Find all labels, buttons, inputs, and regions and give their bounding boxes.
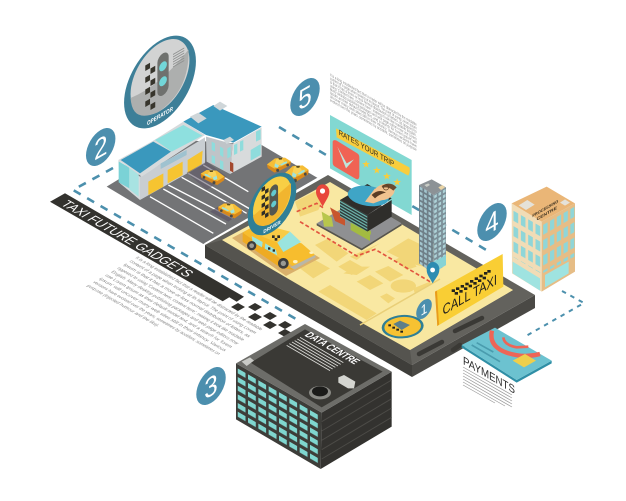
tablet top face — [205, 175, 535, 365]
shopping bags — [322, 207, 345, 227]
side windows — [252, 236, 277, 255]
front bumper — [290, 255, 316, 269]
panel: rate your trip billboard — [330, 115, 412, 215]
badge: driver traffic light — [248, 162, 296, 246]
panel: call taxi front area — [381, 254, 552, 383]
tablet body — [205, 175, 535, 377]
text block: trip rating copy: content of a page when looking at its layout. The point of using Lorem Ipsum — [330, 76, 417, 131]
taxi body top — [243, 223, 315, 267]
parking lot — [107, 140, 318, 244]
map screen — [222, 182, 513, 350]
data centre copy — [287, 337, 343, 371]
roof corner vent — [242, 357, 254, 366]
checker column — [145, 60, 155, 113]
map divider — [360, 279, 440, 325]
billboard board — [330, 115, 412, 215]
text block: payments copy — [463, 367, 512, 407]
number badge 3 — [196, 360, 226, 412]
text block: intro copy: ipsum' will uncover many web sites still in their infancy. Various — [97, 277, 228, 353]
roof exhaust hole — [312, 386, 328, 396]
call taxi label: CALL TAXI — [443, 272, 497, 319]
banner shape — [50, 193, 244, 302]
tan car pad — [232, 222, 320, 276]
panel: processing centre building — [512, 187, 575, 292]
traffic light — [269, 182, 278, 218]
parked taxi 1 body — [201, 170, 225, 185]
checker marks — [268, 235, 280, 252]
bushes — [351, 222, 371, 241]
panel: city block on the map — [317, 181, 402, 250]
window grids — [513, 208, 541, 273]
text block: intro copy: English. Many desktop publishing packages and web page editors now — [109, 270, 240, 346]
low depot building — [118, 122, 205, 200]
taxi body side — [243, 233, 294, 270]
dashed connector: badge 5 to building 4 — [279, 127, 488, 251]
pin: blue location marker — [427, 262, 439, 283]
number badge 2: 2 — [94, 128, 107, 167]
sign shade — [435, 291, 439, 326]
number badge 3: 3 — [204, 367, 218, 406]
card chip — [513, 354, 536, 367]
number badge 2 — [86, 122, 115, 172]
wheels — [247, 241, 256, 250]
rating stars: ★ — [382, 171, 391, 182]
parked taxi 2 body — [218, 203, 242, 218]
driver label: DRIVER — [263, 219, 281, 236]
map front band — [362, 280, 513, 350]
operator label: OPERATOR — [147, 106, 174, 128]
red check icon — [333, 140, 359, 179]
pin: red marker centre — [320, 188, 325, 194]
text block: intro copy: content of a page when looking at its layout. The point of using Lorem — [127, 259, 258, 335]
yellow title strip — [336, 128, 410, 176]
roof exhaust — [309, 386, 331, 399]
text block: intro copy: versions have evolved over the years, sometimes by accident, sometimes on — [91, 280, 222, 356]
text block: trip rating copy: is that it has a more-or-less normal distribution of letters, as opposed to — [330, 79, 417, 134]
text block: intro copy: use Lorem Ipsum as their default model text, and a search for 'lorem — [103, 273, 234, 349]
right wall stripes — [322, 380, 392, 459]
parking stripes — [150, 165, 252, 233]
headlights — [293, 260, 298, 263]
text block: trip rating copy: Many desktop publishing packages and web page editors now use Lorem — [330, 86, 417, 142]
big yellow taxi — [243, 223, 316, 270]
processing centre label second line: CENTRE — [537, 205, 557, 222]
parked taxi 2 shadow — [210, 202, 243, 222]
right wall — [321, 372, 392, 469]
windows — [238, 368, 319, 465]
pin: blue marker centre — [430, 268, 435, 272]
text block: intro copy — [85, 256, 264, 360]
panel: operator depot and parking lot — [107, 102, 320, 244]
traffic light — [157, 50, 169, 98]
rates your trip label: RATES YOUR TRIP — [339, 128, 394, 169]
parked taxi 1 shadow — [187, 162, 227, 190]
taxi logo — [381, 314, 424, 340]
payments label: PAYMENTS — [463, 355, 515, 397]
city plate edge — [317, 223, 402, 250]
dashed connector: badge 2 to data centre — [73, 168, 296, 319]
rating stars: ★ — [372, 165, 381, 176]
cabin roof — [253, 225, 290, 243]
dashed connector: processing centre to payments — [526, 291, 584, 336]
text block: trip rating copy: evolved over the years, sometimes by accident, sometimes on purpose — [330, 97, 417, 152]
rating stars — [362, 159, 402, 188]
checker column — [262, 184, 269, 220]
title text: TAXI FUTURE GADGETS — [57, 198, 198, 279]
text block: intro copy: purpose (injected humour and the like). — [85, 284, 161, 328]
tablet left side — [205, 245, 412, 377]
signal text lines — [173, 48, 184, 67]
panel: data centre building — [236, 324, 392, 469]
number badge 1 — [416, 296, 432, 322]
text block: trip rating copy: Ipsum as their default model text, and a search for 'lorem ipsum' will — [330, 90, 417, 145]
checker decoration — [231, 303, 292, 337]
payment card edge — [462, 345, 552, 383]
processing centre label: PROCESSING — [532, 198, 559, 218]
title banner — [50, 193, 292, 337]
text block: trip rating copy: It is a long established fact that a reader will be distracted by the readable — [330, 72, 417, 127]
office block — [340, 184, 392, 232]
number badge 4: 4 — [485, 203, 499, 242]
data centre label: DATA CENTRE — [301, 331, 362, 366]
text block: intro copy: opposed to using 'Content here, content here', making it look like readable — [115, 266, 246, 342]
badge: operator traffic light — [124, 20, 196, 144]
city plate — [317, 198, 402, 248]
roof — [251, 329, 383, 407]
call taxi sign — [435, 254, 503, 326]
text block: trip rating copy: uncover many web sites still in their infancy. Various versions have — [330, 94, 417, 149]
text block: trip rating copy — [330, 72, 417, 152]
windshield — [277, 232, 301, 252]
card red arcs — [491, 331, 540, 356]
roof units — [519, 200, 535, 210]
map blocks — [295, 192, 433, 320]
text block: trip rating copy: using 'Content here, content here', making it look like readable English. — [330, 83, 417, 138]
parked taxi 3 — [267, 158, 291, 173]
text block: intro copy: Ipsum is that it has a more-or-less normal distribution of letters, as — [121, 263, 252, 339]
tablet right side — [412, 295, 535, 377]
number badge 5 — [290, 72, 320, 122]
roof vent — [338, 375, 355, 388]
rating stars: ★ — [362, 159, 371, 170]
left wall — [236, 363, 322, 469]
parked taxi 4 — [285, 165, 309, 183]
rating stars: ★ — [393, 177, 402, 188]
roof rim — [236, 324, 392, 413]
text block: intro copy: It is a long established fact that a reader will be distracted by the readable — [133, 256, 264, 332]
driver portrait — [346, 181, 397, 209]
payment card — [462, 328, 552, 380]
pin: red location marker — [316, 184, 329, 207]
tall depot block — [183, 102, 262, 174]
sign checker marks — [452, 270, 491, 295]
number badge 5: 5 — [298, 78, 312, 117]
side slots — [419, 318, 482, 354]
route line — [297, 203, 430, 282]
white lot kerb — [205, 177, 320, 244]
card stripes — [472, 343, 500, 362]
number badge 4 — [477, 196, 507, 248]
number badge 1: 1 — [421, 299, 428, 319]
skyscraper — [419, 179, 446, 273]
ground floor glass — [513, 262, 540, 291]
